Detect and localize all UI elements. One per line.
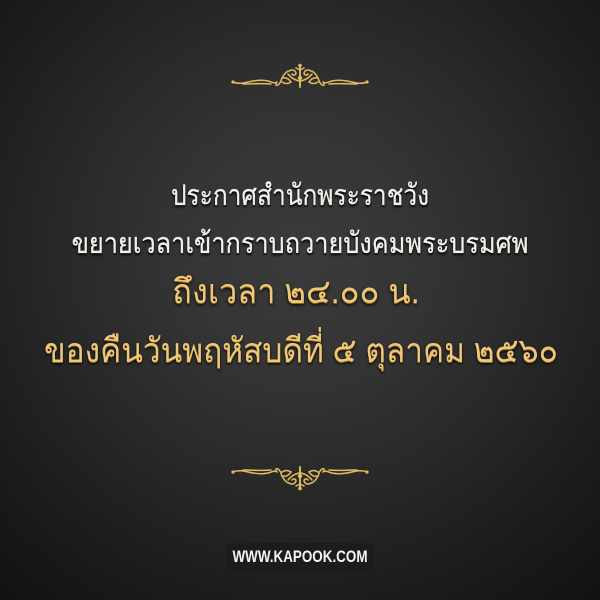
ornament: top gold flourish [231,64,369,88]
heading: gold date line: ของคืนวันพฤหัสบดีที่ ๕ ตุลาคม ๒๕๖๐ [44,332,558,370]
footer: website label [226,543,374,571]
heading: gold time line: ถึงเวลา ๒๔.๐๐ น. [172,273,420,311]
footer: website label: WWW.KAPOOK.COM [232,547,368,566]
heading: second white line: ขยายเวลาเข้ากราบถวายบังคมพระบรมศพ [72,228,528,260]
ornament: bottom gold flourish [231,466,369,490]
heading: first white line: ประกาศสำนักพระราชวัง [171,180,429,212]
